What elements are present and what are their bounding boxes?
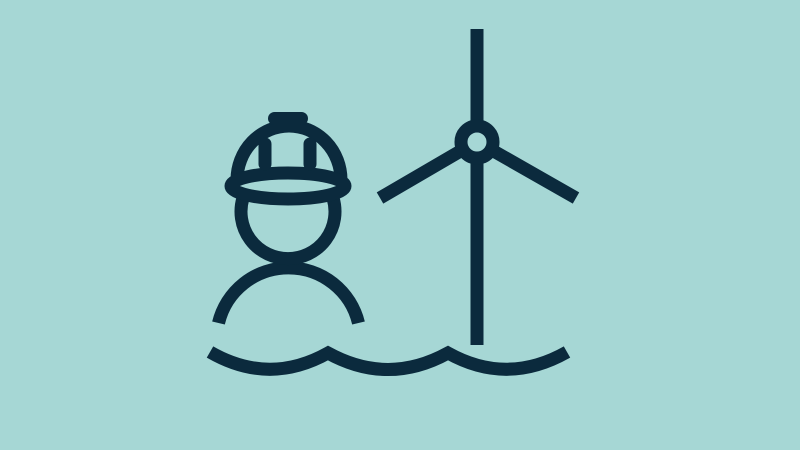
helmet ribs	[265, 144, 310, 164]
helmet cap	[268, 112, 308, 125]
head	[241, 198, 335, 259]
icon: worker	[218, 112, 358, 323]
helmet brim	[231, 173, 345, 199]
waves	[210, 352, 567, 370]
icon: wind turbine	[380, 29, 576, 345]
tower	[470, 29, 484, 345]
blades	[380, 149, 576, 198]
body	[218, 268, 358, 323]
helmet dome	[237, 126, 341, 180]
hub	[461, 126, 493, 158]
